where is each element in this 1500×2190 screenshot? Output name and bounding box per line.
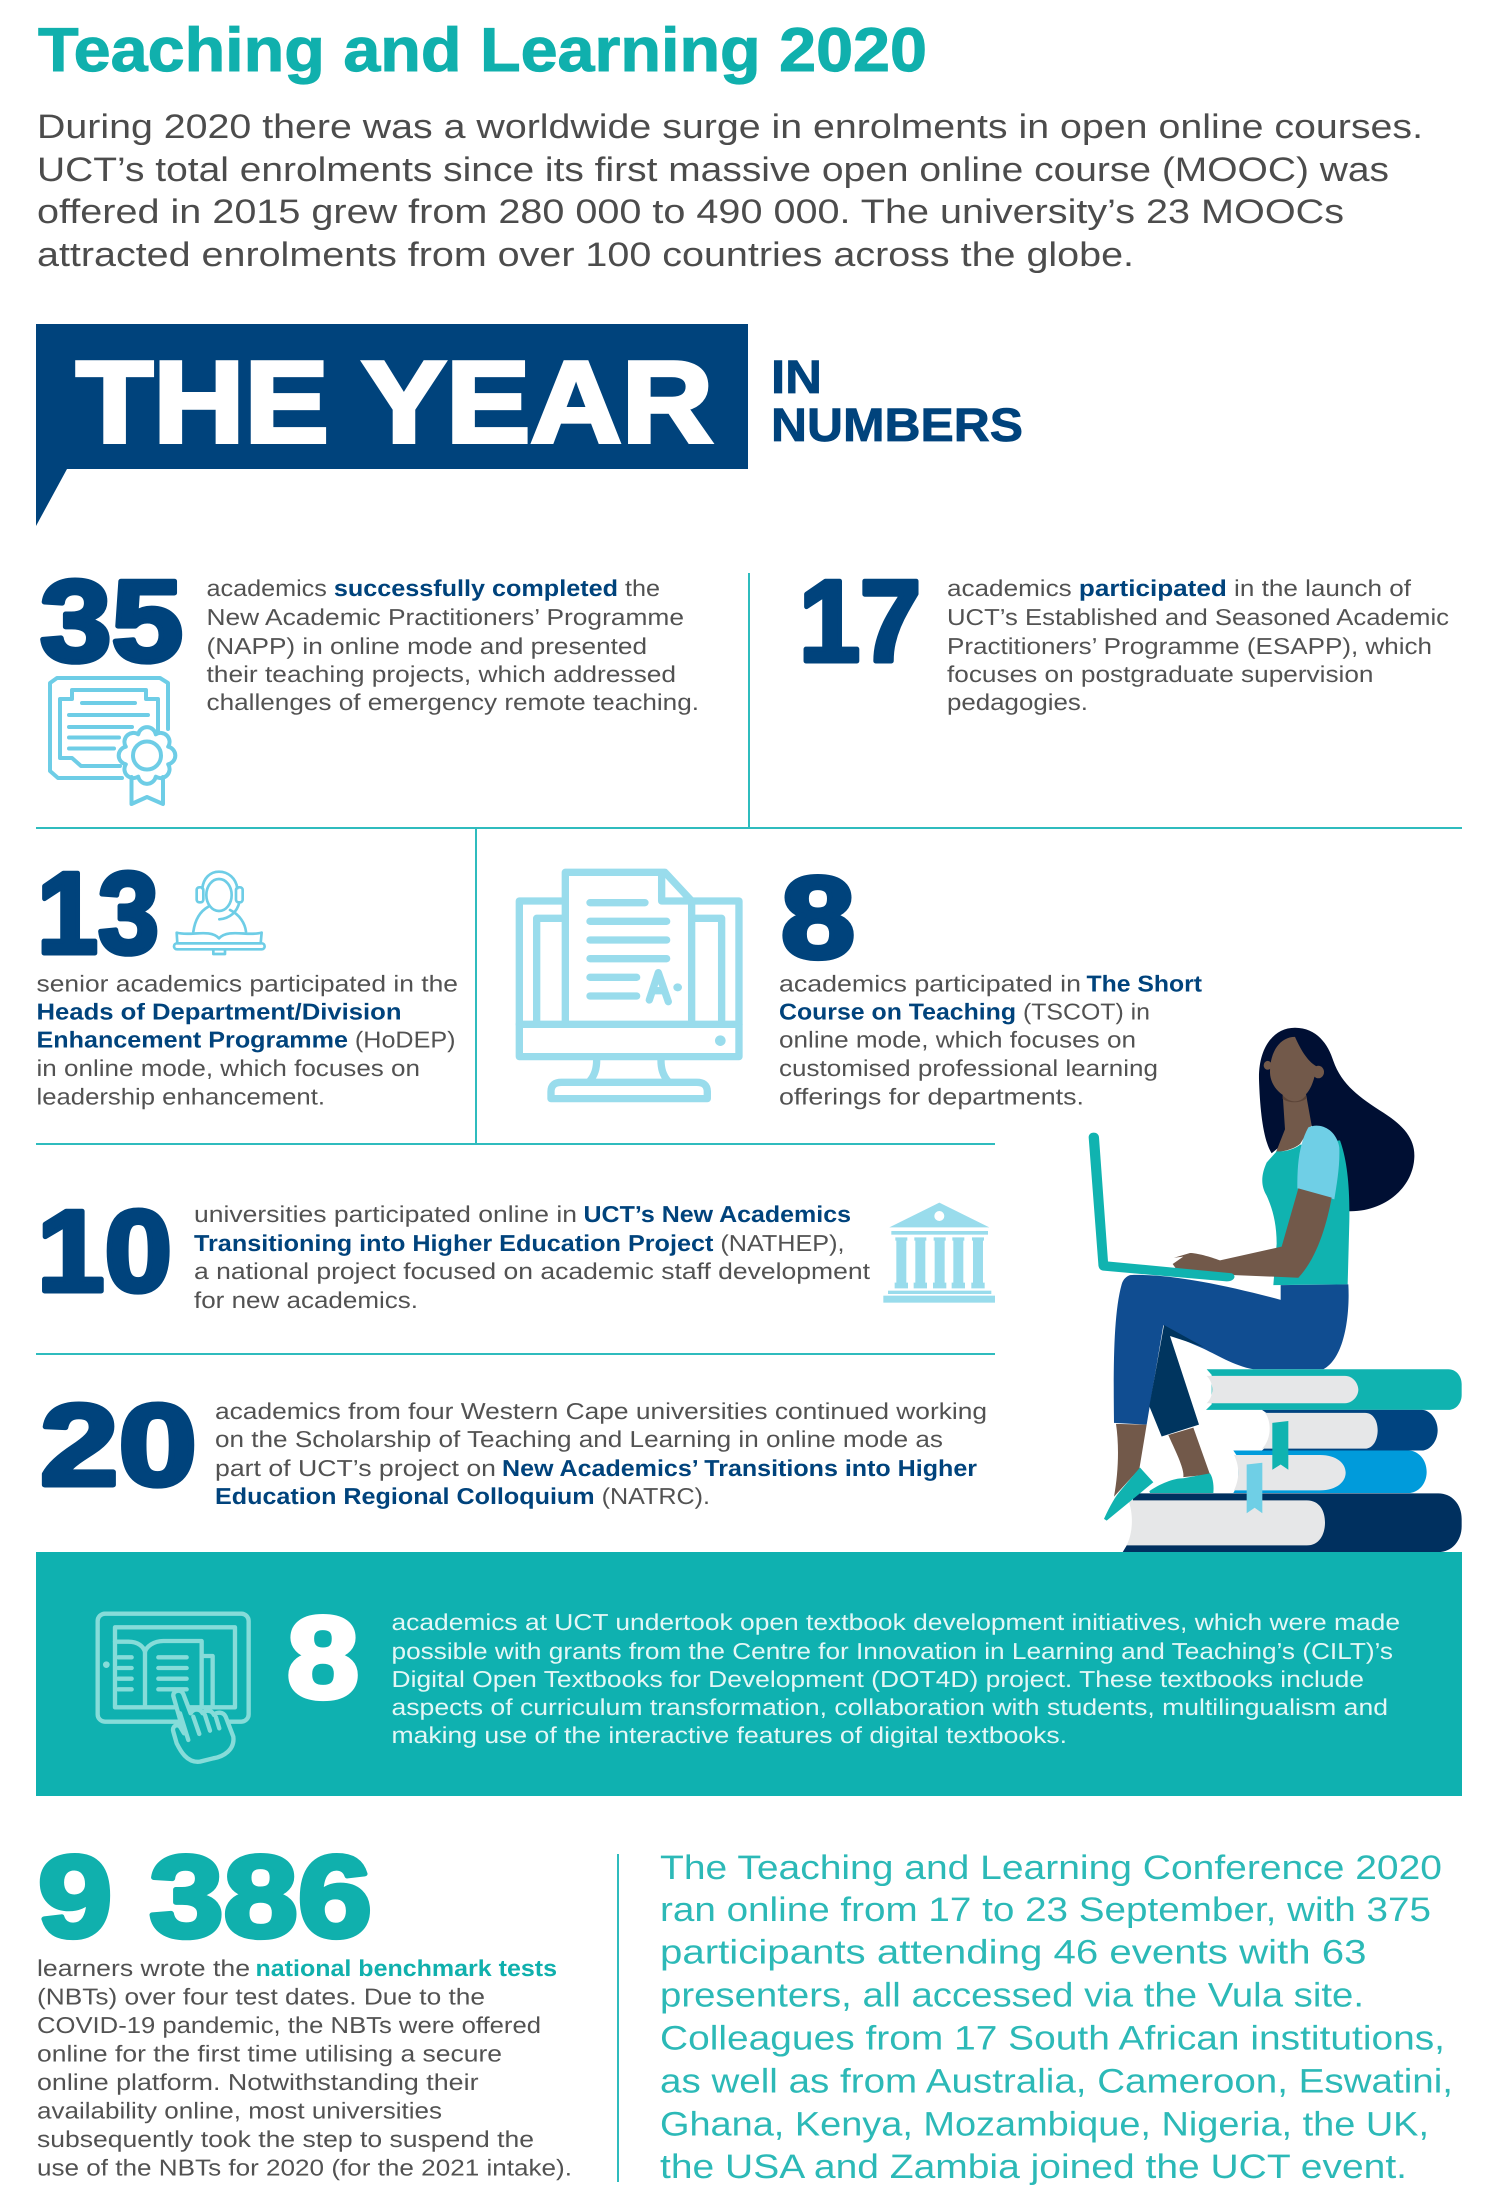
neck xyxy=(1276,1094,1312,1152)
body text xyxy=(392,1609,1400,1748)
face xyxy=(1270,1037,1317,1099)
panel: 10 universities xyxy=(37,1186,995,1316)
banner: the year in numbers xyxy=(36,324,1023,526)
body text: Course on Teaching (TSCOT) in xyxy=(779,998,1150,1024)
icon: person with headset and book xyxy=(174,872,265,954)
title: Teaching and Learning 2020 xyxy=(38,16,927,85)
body text: online platform. Notwithstanding their xyxy=(37,2069,479,2095)
intro paragraph: During 2020 there was a worldwide surge in enrolments in open online courses. xyxy=(37,108,1423,146)
panel: conference text: participants attending 46 events with 63 xyxy=(660,1934,1366,1972)
panel: conference text: the USA and Zambia joined the UCT event. xyxy=(660,2148,1407,2186)
sleeve xyxy=(1297,1126,1339,1199)
body text xyxy=(36,970,458,1110)
body text: Education Regional Colloquium (NATRC). xyxy=(215,1483,710,1509)
body text: for new academics. xyxy=(194,1287,418,1313)
body text: making use of the interactive features of digital textbooks. xyxy=(392,1722,1067,1748)
body text: focuses on postgraduate supervision xyxy=(947,661,1374,687)
banner heading: THE YEAR xyxy=(76,337,713,467)
panel: conference text xyxy=(660,1849,1453,2186)
body text xyxy=(37,1955,572,2180)
intro paragraph xyxy=(37,108,1423,274)
body text: The Short xyxy=(1086,970,1202,996)
icon: tablet with book and hand xyxy=(98,1614,249,1762)
number 10: 10 xyxy=(37,1186,172,1316)
hair xyxy=(1259,1028,1414,1211)
body text: leadership enhancement. xyxy=(36,1084,325,1110)
number 17: 17 xyxy=(799,556,921,686)
panel: conference text: Colleagues from 17 South African institutions, xyxy=(660,2020,1445,2058)
intro paragraph: UCT’s total enrolments since its first massive open online course (MOOC) was xyxy=(37,151,1389,189)
body text: on the Scholarship of Teaching and Learning in online mode as xyxy=(215,1426,943,1452)
body text: challenges of emergency remote teaching. xyxy=(206,689,699,715)
panel: conference text: as well as from Australia, Cameroon, Eswatini, xyxy=(660,2062,1453,2100)
body text: COVID-19 pandemic, the NBTs were offered xyxy=(37,2012,541,2038)
number 8: 8 xyxy=(287,1592,359,1722)
banner subheading: IN xyxy=(771,350,822,403)
body text: academics successfully completed the xyxy=(206,575,660,601)
panel: 9 386 learners xyxy=(37,1832,572,2180)
intro paragraph: offered in 2015 grew from 280 000 to 490 000. The university’s 23 MOOCs xyxy=(37,193,1344,231)
body text: (NAPP) in online mode and presented xyxy=(206,633,647,659)
panel: conference text: Ghana, Kenya, Mozambique, Nigeria, the UK, xyxy=(660,2106,1429,2144)
body text xyxy=(215,1398,987,1509)
number 20: 20 xyxy=(40,1380,197,1510)
icon: computer with document xyxy=(519,872,739,1099)
number 35: 35 xyxy=(40,556,183,686)
panel: conference text: ran online from 17 to 23 September, with 375 xyxy=(660,1891,1431,1929)
number 8: 8 xyxy=(781,852,855,982)
body text: senior academics participated in the xyxy=(36,970,458,996)
body text: academics at UCT undertook open textbook development initiatives, which were made xyxy=(392,1609,1400,1635)
body text: academics participated in the launch of xyxy=(947,575,1412,601)
body text: (NBTs) over four test dates. Due to the xyxy=(37,1984,485,2010)
panel: 8 academics short course xyxy=(519,852,1202,1110)
lower legs xyxy=(1114,1424,1147,1497)
panel: 13 senior academics xyxy=(36,848,458,1110)
body text: customised professional learning xyxy=(779,1055,1158,1081)
body text: Digital Open Textbooks for Development (DOT4D) project. These textbooks include xyxy=(392,1666,1364,1692)
shirt xyxy=(1262,1140,1349,1285)
number 13: 13 xyxy=(37,848,159,978)
body text: online mode, which focuses on xyxy=(779,1026,1136,1052)
body text: Practitioners’ Programme (ESAPP), which xyxy=(947,633,1432,659)
body text xyxy=(206,575,699,715)
body text: part of UCT’s project on xyxy=(215,1455,496,1481)
panel: teal open textbooks band xyxy=(36,1552,1462,1796)
body text: in online mode, which focuses on xyxy=(36,1055,420,1081)
body text: academics participated in xyxy=(779,970,1081,996)
intro paragraph: attracted enrolments from over 100 countries across the globe. xyxy=(37,236,1134,274)
body text: UCT’s New Academics xyxy=(584,1201,851,1227)
body text: online for the first time utilising a secure xyxy=(37,2040,502,2066)
panel: 35 academics xyxy=(40,556,699,804)
body text xyxy=(947,575,1449,715)
illustration: woman with laptop on books xyxy=(1089,1028,1462,1552)
body text: UCT’s Established and Seasoned Academic xyxy=(947,604,1449,630)
body text: Enhancement Programme (HoDEP) xyxy=(36,1026,455,1052)
panel: 20 academics xyxy=(40,1380,987,1510)
arm xyxy=(1173,1188,1332,1278)
panel: conference text: presenters, all accessed via the Vula site. xyxy=(660,1976,1364,2014)
band background xyxy=(36,1552,1462,1796)
number 9 386: 9 386 xyxy=(38,1832,372,1962)
body text: academics from four Western Cape universities continued working xyxy=(215,1398,987,1424)
shoes xyxy=(1104,1468,1153,1521)
body text: possible with grants from the Centre for Innovation in Learning and Teaching’s (CILT)’s xyxy=(392,1638,1393,1664)
book stack xyxy=(1123,1369,1462,1552)
body text xyxy=(779,970,1202,1110)
body text: subsequently took the step to suspend the xyxy=(37,2126,534,2152)
body text: Transitioning into Higher Education Project (NATHEP), xyxy=(194,1230,844,1256)
body text: aspects of curriculum transformation, collaboration with students, multilingualism and xyxy=(392,1694,1388,1720)
body text: universities participated online in xyxy=(194,1201,577,1227)
body text: their teaching projects, which addressed xyxy=(206,661,676,687)
body text: a national project focused on academic staff development xyxy=(194,1258,871,1284)
body text: pedagogies. xyxy=(947,689,1088,715)
panel: conference text: The Teaching and Learning Conference 2020 xyxy=(660,1849,1442,1887)
body text: availability online, most universities xyxy=(37,2098,442,2124)
body text: Heads of Department/Division xyxy=(36,998,402,1024)
body text: New Academic Practitioners’ Programme xyxy=(206,604,684,630)
speech-bubble banner shape xyxy=(36,324,748,526)
banner subheading xyxy=(771,350,1023,451)
body text: learners wrote the xyxy=(37,1955,250,1981)
body text: offerings for departments. xyxy=(779,1084,1084,1110)
panel: 17 academics xyxy=(799,556,1449,715)
trousers xyxy=(1114,1275,1349,1425)
body text: New Academics’ Transitions into Higher xyxy=(502,1455,977,1481)
icon: university building xyxy=(883,1203,995,1303)
body text: use of the NBTs for 2020 (for the 2021 intake). xyxy=(37,2154,572,2180)
laptop xyxy=(1089,1133,1234,1281)
body text: national benchmark tests xyxy=(256,1955,557,1981)
body text xyxy=(194,1201,871,1313)
icon: certificate xyxy=(50,678,175,804)
banner subheading: NUMBERS xyxy=(771,398,1023,451)
